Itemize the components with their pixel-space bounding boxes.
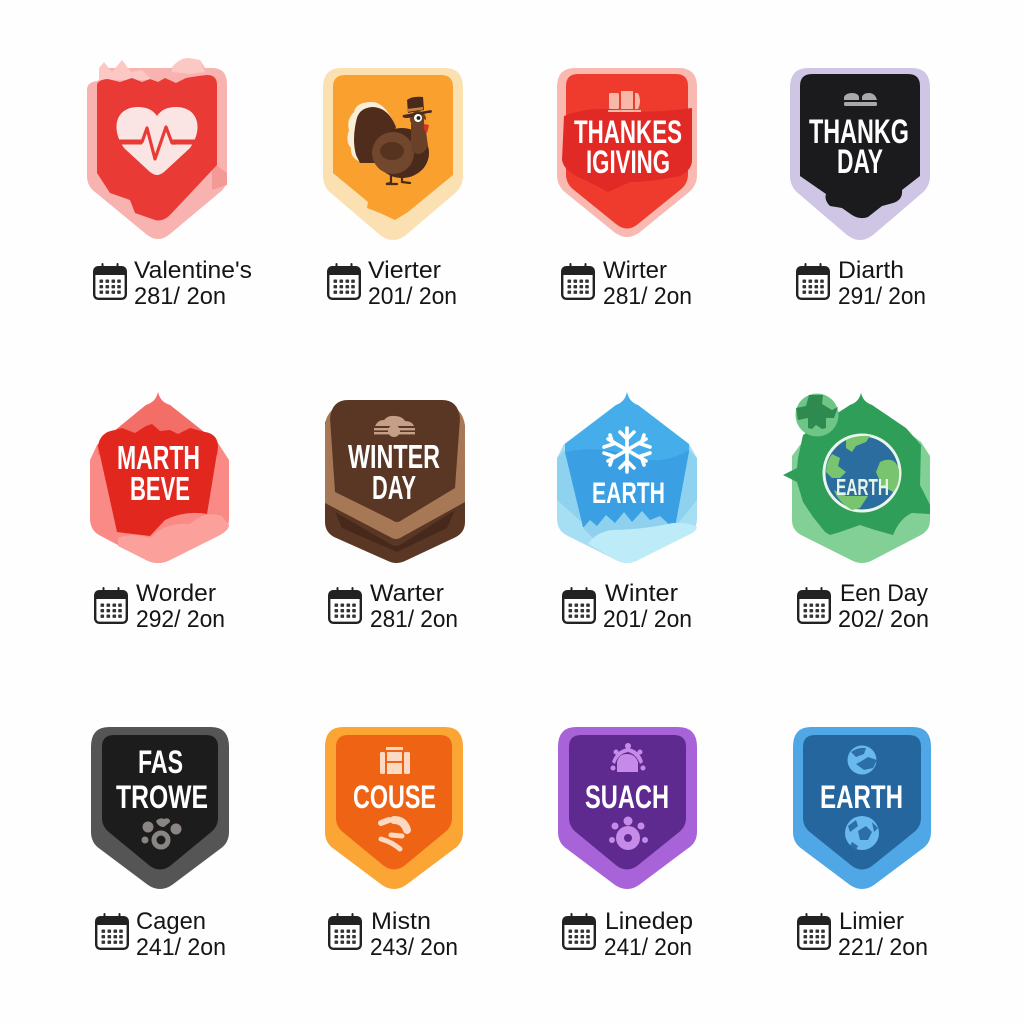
label: Winter: 201/ 2on — [603, 606, 692, 633]
icon: suitcase — [380, 747, 410, 774]
label: Linedep — [563, 908, 693, 961]
label: Worder: 292/ 2on — [136, 606, 225, 633]
label: Diarth: Diarth — [838, 257, 904, 284]
label: Valentine's: Valentine's — [134, 257, 252, 284]
badge: Earth snowflake — [557, 392, 697, 563]
icon: snowflake — [604, 428, 650, 472]
label: Vierter: Vierter — [368, 257, 441, 284]
icon: globe bottom — [845, 816, 879, 850]
icon: roast dish — [608, 91, 641, 112]
label: Cagen: 241/ 2on — [136, 934, 226, 961]
label: Winter — [563, 580, 692, 633]
badge: Fas Trowe — [91, 727, 229, 889]
label: Mistn: 243/ 2on — [370, 934, 458, 961]
icon: turkey — [347, 97, 432, 184]
icon: dome — [610, 743, 646, 772]
icon: winter hat — [374, 416, 415, 437]
label: Worder — [95, 580, 225, 633]
badge: Earth globe — [783, 393, 930, 563]
badge: Thankg Day — [790, 68, 930, 240]
badge: Earth blue — [793, 727, 931, 889]
label: Diarth — [797, 257, 926, 310]
label: Wirter: 281/ 2on — [603, 283, 692, 310]
label: Warter: 281/ 2on — [370, 606, 458, 633]
icon: ornament — [609, 816, 648, 850]
heading — [574, 114, 682, 180]
label: Linedep: Linedep — [605, 908, 693, 935]
heading: WINTER — [348, 438, 440, 475]
heading: DAY — [837, 143, 883, 181]
label: Warter — [329, 580, 458, 633]
label: Wirter: Wirter — [603, 257, 667, 284]
label: Worder: Worder — [136, 580, 216, 607]
icon: bread slices — [381, 820, 407, 849]
label: Limier: Limier — [839, 908, 904, 935]
heading: EARTH — [820, 779, 903, 815]
label: Een Day — [798, 580, 929, 633]
heading — [116, 744, 208, 815]
heading: DAY — [372, 469, 416, 506]
label: Winter: Winter — [605, 580, 678, 607]
badge: Suach — [558, 727, 697, 889]
label: Diarth: 291/ 2on — [838, 283, 926, 310]
label: Limier — [798, 908, 928, 961]
heading: EARTH — [836, 474, 889, 500]
heading: MARTH — [117, 439, 200, 476]
label: Mistn — [329, 908, 458, 961]
badge: Marth Beve — [90, 392, 229, 563]
heading: THANKES — [574, 114, 682, 150]
badge: Couse — [325, 727, 463, 889]
label: Valentine's: 281/ 2on — [134, 283, 226, 310]
label: Cagen — [96, 908, 226, 961]
icon: globe top — [848, 746, 877, 774]
badge: Valentine's heart — [87, 58, 227, 239]
label: Een Day: 202/ 2on — [838, 606, 929, 633]
icon: earth globe — [824, 435, 900, 511]
heading: THANKG — [809, 113, 909, 151]
icon: ornament — [142, 818, 182, 847]
heading: EARTH — [592, 477, 665, 510]
heading — [117, 439, 200, 507]
label: Cagen: Cagen — [136, 908, 206, 935]
label: Vierter: 201/ 2on — [368, 283, 457, 310]
label: Valentine's — [94, 257, 252, 310]
badge: Winter Day — [325, 400, 465, 563]
label: Wirter — [562, 257, 692, 310]
badge: Thankes Igiving — [557, 68, 697, 237]
heading — [809, 113, 909, 181]
label: Mistn: Mistn — [371, 908, 431, 935]
heading: FAS — [138, 744, 183, 780]
label: Warter: Warter — [370, 580, 444, 607]
heading: IGIVING — [586, 144, 670, 180]
heading: TROWE — [116, 779, 208, 815]
icon: small globe — [796, 394, 838, 436]
heading — [348, 438, 440, 506]
heading: BEVE — [130, 470, 190, 507]
label: Linedep: 241/ 2on — [604, 934, 692, 961]
label: Een Day: Een Day — [840, 580, 928, 607]
heading: COUSE — [353, 779, 436, 815]
icon: heart with pulse — [114, 107, 200, 175]
label: Vierter — [328, 257, 457, 310]
icon: dish — [844, 93, 877, 106]
heading: SUACH — [585, 779, 669, 815]
badge: turkey — [323, 68, 463, 240]
label: Limier: 221/ 2on — [838, 934, 928, 961]
